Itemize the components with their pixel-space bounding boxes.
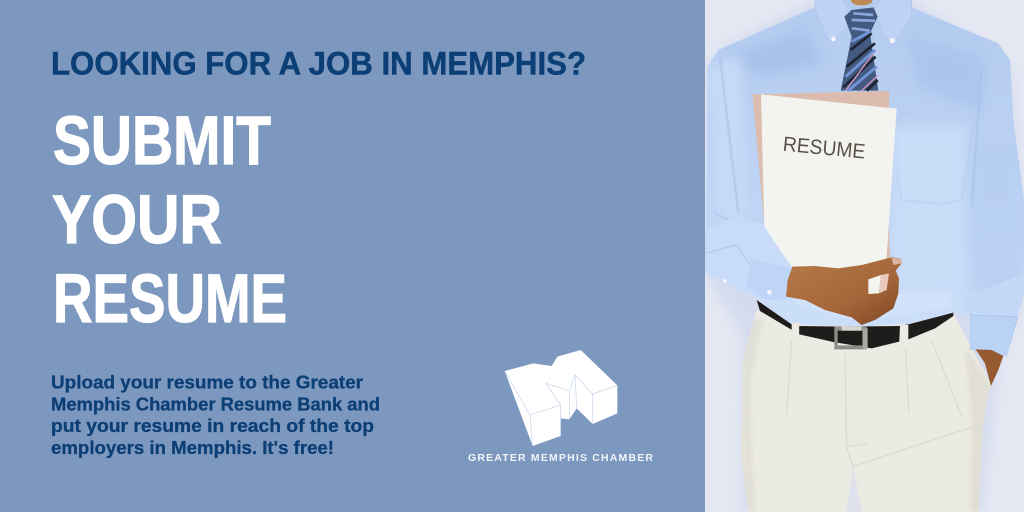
title: submit your resume: YOUR [52,181,222,258]
icon: chamber M mark [505,350,617,446]
resume sheet [761,94,897,270]
photo: man holding resume [705,0,1024,512]
body shadow [705,0,1024,512]
collar buttons [831,37,895,43]
shirt gap over belt [758,298,953,326]
resume label: RESUME [782,133,866,164]
neck [851,0,872,5]
logo: greater memphis chamber [468,350,653,464]
tie [841,7,878,91]
collar left [815,0,852,42]
shirt [705,0,1024,367]
logo wordmark: GREATER MEMPHIS CHAMBER [468,452,653,464]
title: submit your resume: SUBMIT [53,102,271,179]
trousers [741,310,990,512]
belt buckle [834,327,867,349]
hand [786,257,902,325]
title: submit your resume: RESUME [53,260,287,337]
right hand in pocket [976,349,1003,386]
folder [752,91,890,263]
body text: put your resume in reach of the top [51,416,374,436]
body text: employers in Memphis. It's free! [51,438,334,458]
belt [757,300,953,349]
body text [51,372,380,458]
photo backdrop [705,0,1024,512]
title: submit your resume [52,102,287,337]
left cuff and forearm [705,219,792,277]
body text: Memphis Chamber Resume Bank and [51,394,380,414]
heading: looking for a job: LOOKING FOR A JOB IN MEMPHIS? [51,45,586,81]
belt loops [792,322,800,334]
background panel [0,0,705,512]
collar right [875,0,912,45]
body text: Upload your resume to the Greater [51,372,363,392]
trouser gap [848,468,860,506]
